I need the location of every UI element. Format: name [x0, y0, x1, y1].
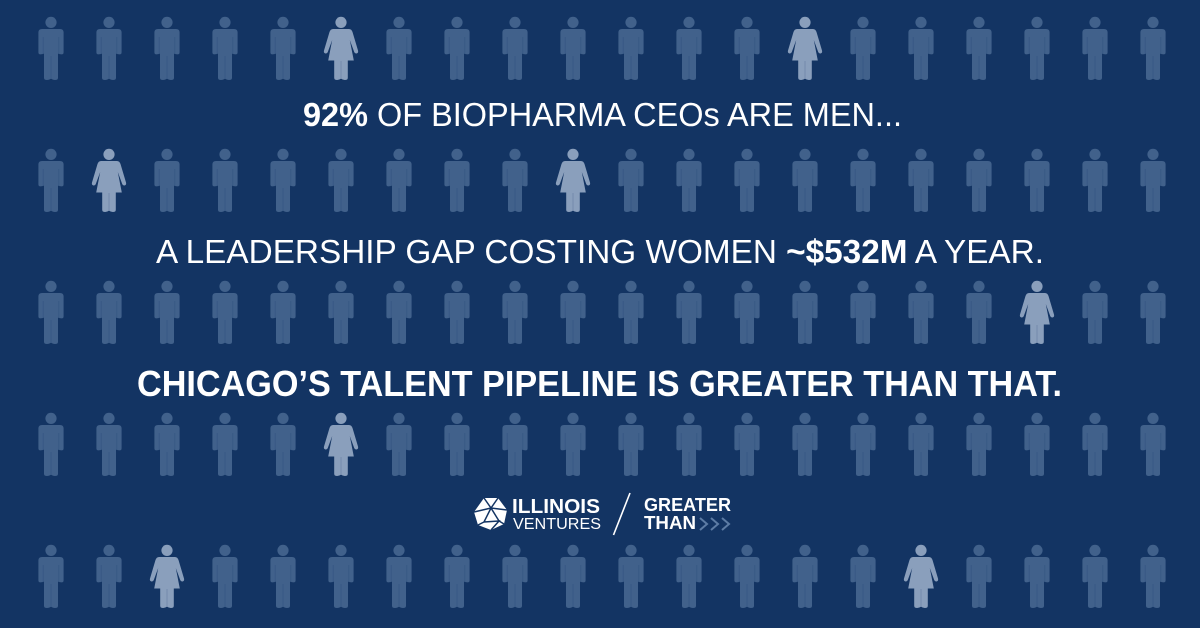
logo wordmark: Illinois Ventures [512, 496, 601, 533]
pictogram row 4 [38, 413, 1166, 476]
headline line 3: CHICAGO’S TALENT PIPELINE IS GREATER THAN THAT. [137, 363, 1062, 404]
pictogram row 3 [38, 281, 1166, 344]
icon: Illinois Ventures polyhedron [474, 498, 507, 530]
pictogram row 2 [38, 149, 1166, 212]
logo lockup [474, 493, 731, 535]
logo wordmark: Illinois Ventures: VENTURES [513, 516, 601, 533]
logo divider slash [614, 493, 630, 535]
headline line 1: 92% OF BIOPHARMA CEOs ARE MEN... [303, 96, 902, 133]
logo wordmark: Greater Than: GREATER [644, 494, 731, 515]
logo wordmark: Greater Than [644, 494, 731, 533]
pictogram row 1 [38, 17, 1166, 80]
logo wordmark: Greater Than: THAN [644, 512, 696, 533]
icon: triple chevrons [700, 518, 729, 530]
pictogram row 5 [38, 545, 1166, 608]
logo wordmark: Illinois Ventures: ILLINOIS [512, 496, 600, 518]
headline line 2: A LEADERSHIP GAP COSTING WOMEN ~$532M A YEAR. [156, 233, 1044, 270]
